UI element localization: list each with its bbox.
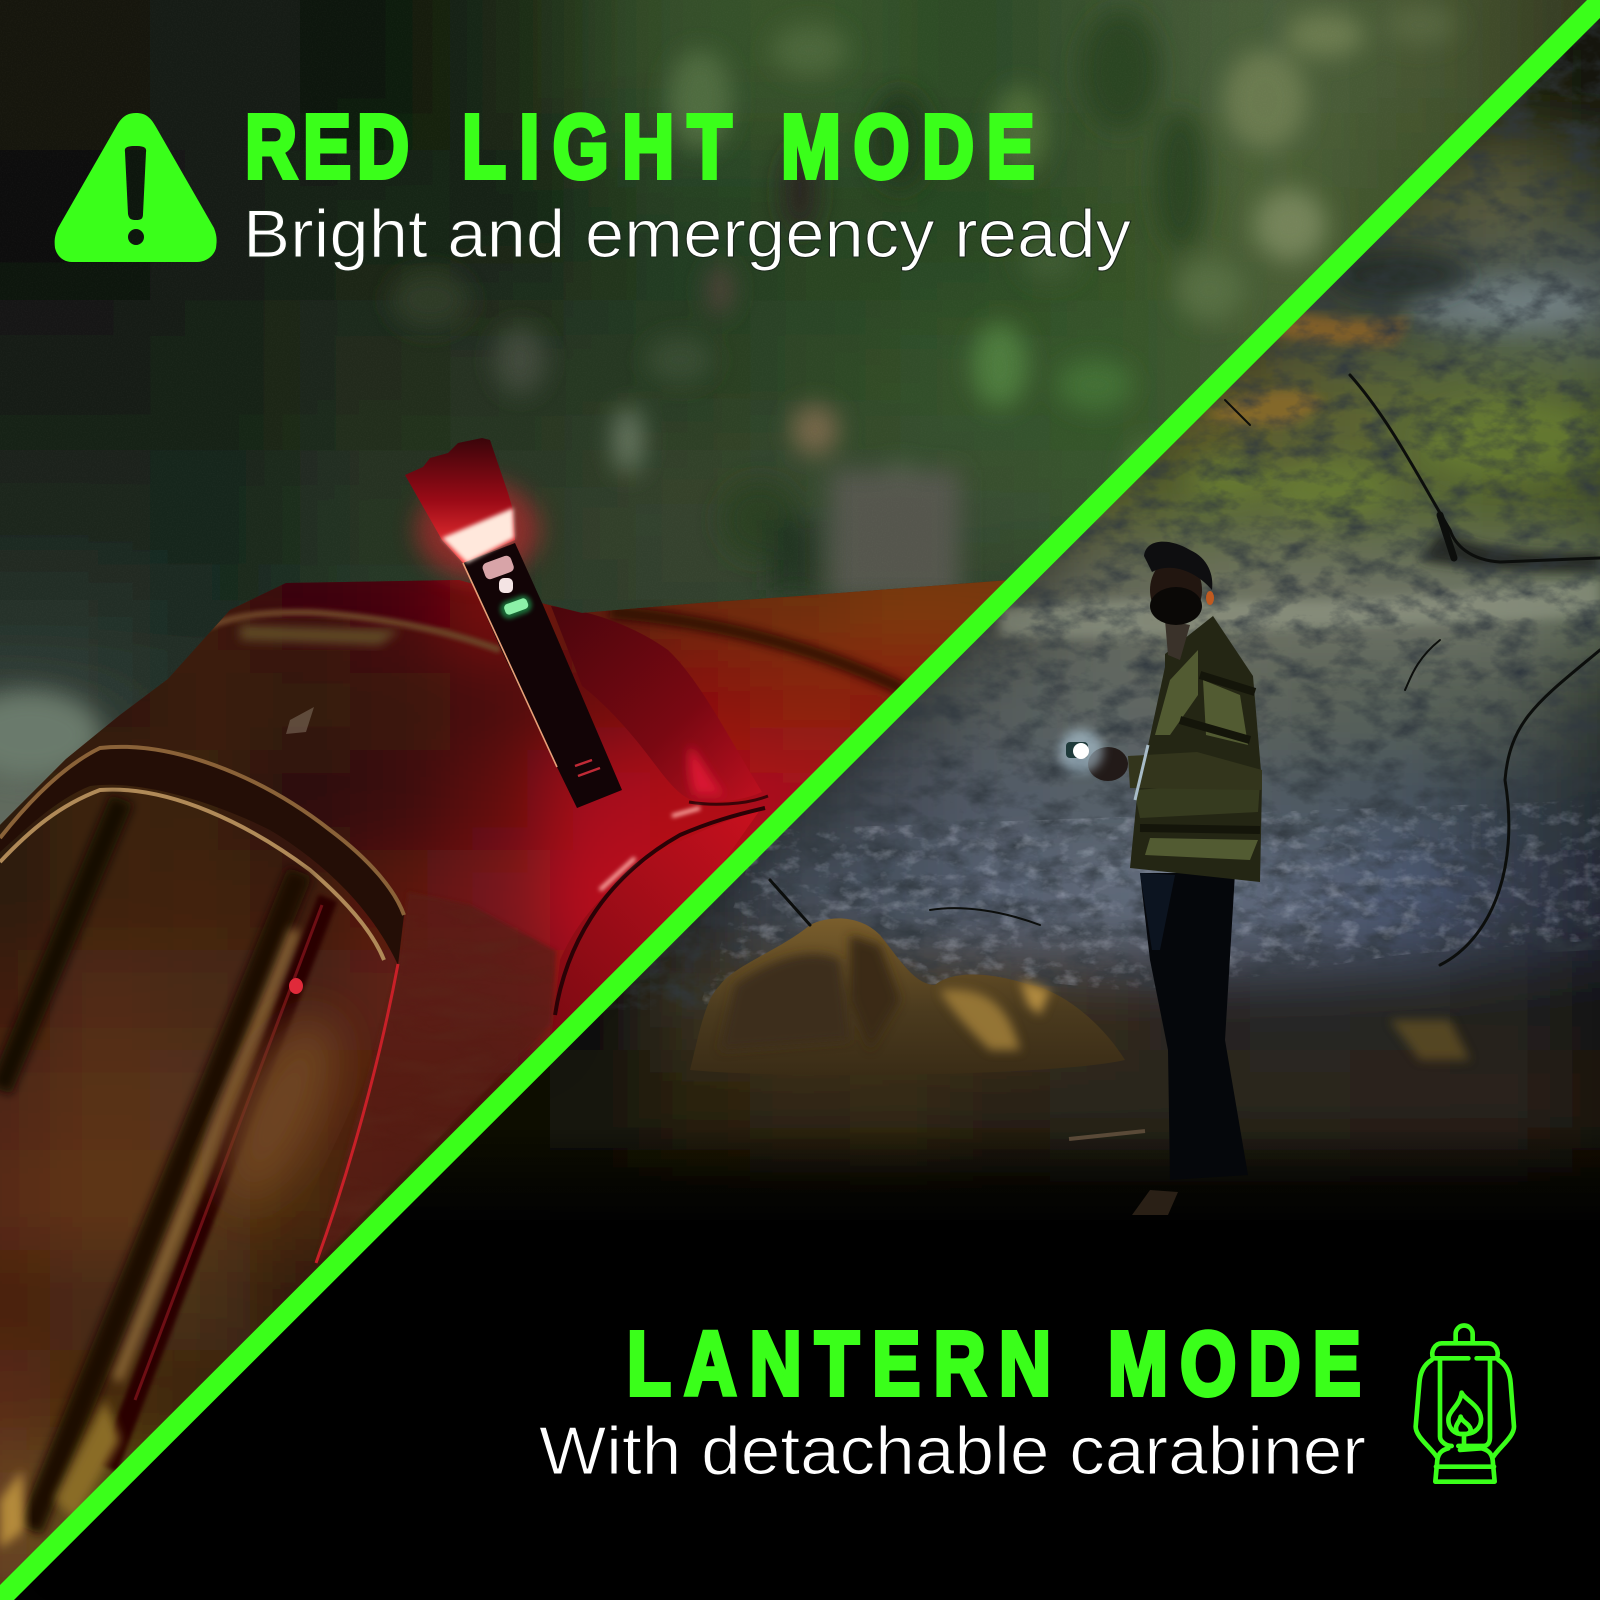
car: spoiler base shadow (689, 796, 768, 804)
flashlight with red light (405, 438, 622, 808)
car: red window edge line (316, 964, 398, 1263)
flashlight base rings (575, 760, 600, 776)
cave: dark cracks (770, 375, 1600, 965)
cave: orange rock formation (690, 918, 1125, 1075)
car: rear deck shadow (610, 612, 905, 690)
car: gold reflection lower corner (0, 1470, 25, 1548)
person: sandal (1132, 1190, 1178, 1215)
flashlight in hand (1066, 742, 1088, 758)
flashlight battery indicator (503, 597, 529, 616)
person silhouette holding flashlight (1059, 542, 1262, 1215)
heading: red light mode: RED (245, 97, 409, 197)
person: neck (1165, 620, 1190, 660)
flashlight glow (416, 480, 540, 580)
car: pillar streak texture (300, 880, 570, 1280)
ground shadow gradient (300, 1130, 1600, 1220)
stick on ground (1069, 1131, 1145, 1139)
heading: red light mode (245, 97, 1035, 197)
cave wall rock texture (600, 0, 1600, 1080)
flashlight power button (481, 554, 515, 581)
person: shirt edge highlight (1135, 745, 1148, 800)
person: sleeve (1128, 752, 1262, 790)
car: C pillar (316, 892, 556, 1263)
person: jacket light panels (1134, 650, 1260, 860)
flashlight glowing ring (442, 508, 514, 563)
person: ear (1206, 591, 1214, 605)
car: sticker reflection (286, 707, 314, 734)
car: panel glints (600, 808, 700, 890)
car paint colour mosaic (0, 580, 1006, 1585)
cave: rock highlight patches (720, 935, 1470, 1060)
person: jeans highlight (1140, 873, 1175, 950)
cave: orange lichen streak (1270, 312, 1410, 346)
flashlight edge highlight (463, 563, 557, 767)
car: light reflection beside pillar (117, 930, 295, 1380)
icon: warning triangle (55, 113, 217, 262)
person: face (1150, 558, 1202, 622)
car: window pillar stripes (0, 799, 122, 1090)
cave: dark lower rock shelf (1420, 530, 1600, 572)
heading: red light mode: MODE (781, 97, 1035, 197)
flashlight battery indicator glow (498, 593, 534, 621)
cave: dark upper rock (1330, 251, 1470, 299)
person: cap (1144, 542, 1212, 590)
person: jacket (1130, 616, 1262, 882)
cave wall pale mineral texture (700, 800, 1600, 1010)
car: spoiler fin (551, 606, 762, 802)
heading: lantern mode: MODE (1108, 1314, 1361, 1414)
car: main window pillar (30, 872, 300, 1530)
heading: red light mode: LIGHT (462, 97, 732, 197)
car: roof rail inner glow (240, 625, 400, 645)
person: beard (1150, 587, 1202, 625)
icon: lantern (1416, 1325, 1514, 1482)
subheading: bright and emergency ready: Bright and emergency ready (243, 196, 1131, 272)
subheading: with detachable carabiner: With detachable carabiner (539, 1413, 1366, 1489)
car: gold reflection beside pillar (55, 1400, 120, 1520)
flashlight head (405, 438, 515, 563)
car: window dark trim band (0, 747, 404, 965)
flashlight mode icon (499, 578, 513, 593)
forest foliage colour mosaic (0, 0, 1587, 825)
car: panel seam (555, 808, 765, 1015)
car: rear window pale reflection (201, 1002, 359, 1218)
person: hand (1088, 747, 1128, 781)
flashlight beam (1073, 743, 1089, 759)
person: legs (1140, 873, 1248, 1180)
car: dark red door seal (108, 898, 328, 1468)
car: bright body panel (551, 810, 760, 1040)
car: roof rail trim (190, 612, 500, 650)
heading: lantern mode: LANTERN (627, 1314, 1051, 1414)
person: jacket dark bands (1140, 675, 1260, 830)
car: window inner trim (0, 790, 384, 960)
heading: lantern mode (627, 1314, 1361, 1414)
cave: pale grey mineral band (1000, 578, 1600, 638)
cave: bluish rock highlight (1405, 279, 1595, 331)
flashlight body (463, 543, 622, 808)
panel: red car body (0, 580, 1006, 1585)
forest: foliage highlights and tree trunk (0, 5, 1456, 779)
flashlight beam glow (1059, 729, 1103, 773)
cave: orange lichen lower (1205, 390, 1325, 425)
car: spoiler highlight (689, 745, 725, 795)
car: window outer trim (0, 747, 404, 915)
car: reflected red light (289, 978, 303, 994)
cave: moss patches (1190, 400, 1600, 520)
forest: film grain (0, 0, 1600, 700)
car: red door seal highlight (135, 905, 322, 1400)
